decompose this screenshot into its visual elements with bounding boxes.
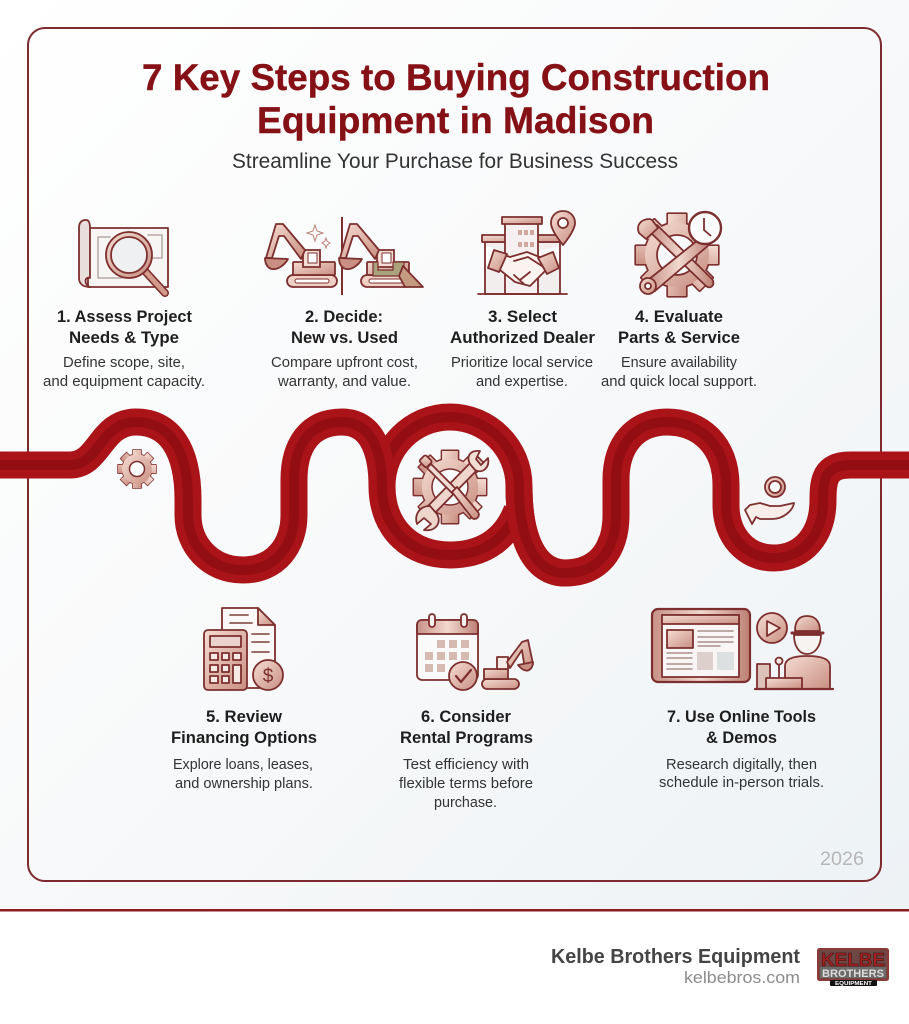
description: schedule in-person trials. xyxy=(659,775,824,791)
heading: New vs. Used xyxy=(291,328,398,347)
description xyxy=(271,355,418,390)
heading: 2. Decide: xyxy=(305,307,383,326)
description: and ownership plans. xyxy=(175,776,313,792)
icon: new and used excavators xyxy=(265,217,423,295)
heading: Parts & Service xyxy=(618,328,740,347)
step 6: rental programs xyxy=(399,614,533,811)
step 4: parts and service xyxy=(601,212,757,390)
heading: 7. Use Online Tools xyxy=(667,707,816,726)
description: Test efficiency with xyxy=(403,757,529,773)
title xyxy=(142,57,770,141)
panel: main frame xyxy=(28,28,881,881)
footer background xyxy=(0,911,909,1024)
description: and expertise. xyxy=(476,374,568,390)
heading xyxy=(171,707,317,747)
heading: Rental Programs xyxy=(400,728,533,747)
logo: Kelbe Brothers Equipment: EQUIPMENT xyxy=(835,981,872,987)
logo: Kelbe Brothers Equipment xyxy=(818,949,888,987)
icon: gear, wrenches and clock xyxy=(636,212,721,296)
description: Prioritize local service xyxy=(451,355,593,371)
title: 7 Key Steps to Buying Construction xyxy=(142,57,770,98)
description: Explore loans, leases, xyxy=(173,757,313,773)
heading xyxy=(618,307,740,347)
step 3: authorized dealer xyxy=(450,211,595,390)
footer url: kelbebros.com xyxy=(684,968,800,987)
logo: Kelbe Brothers Equipment: KELBE xyxy=(821,950,885,970)
description: Compare upfront cost, xyxy=(271,355,418,371)
heading: 1. Assess Project xyxy=(57,307,192,326)
icon: calendar, check and excavator xyxy=(417,614,533,690)
step 5: financing xyxy=(171,608,317,792)
icon: tablet and worker xyxy=(652,609,833,689)
heading xyxy=(57,307,192,347)
icon: calculator, document and coin: $ xyxy=(263,666,274,687)
step 1: assess project needs xyxy=(43,220,205,390)
description xyxy=(43,355,205,390)
heading: 5. Review xyxy=(206,707,283,726)
heading: Financing Options xyxy=(171,728,317,747)
description xyxy=(173,757,313,792)
subtitle: Streamline Your Purchase for Business Success xyxy=(232,150,678,173)
heading: 4. Evaluate xyxy=(635,307,723,326)
description: warranty, and value. xyxy=(277,374,411,390)
winding red road ribbon xyxy=(0,417,909,573)
description xyxy=(399,757,533,811)
heading: 6. Consider xyxy=(421,707,511,726)
description: and quick local support. xyxy=(601,374,757,390)
description xyxy=(659,757,824,791)
heading: Needs & Type xyxy=(69,328,179,347)
heading: Authorized Dealer xyxy=(450,328,595,347)
title: Equipment in Madison xyxy=(257,100,654,141)
footer brand name: Kelbe Brothers Equipment xyxy=(551,946,800,968)
heading xyxy=(450,307,595,347)
description: flexible terms before xyxy=(399,776,533,792)
icon: blueprint and magnifier xyxy=(79,220,168,293)
icon: small gear on road xyxy=(118,450,156,488)
description xyxy=(601,355,757,390)
heading xyxy=(291,307,398,347)
description: Research digitally, then xyxy=(666,757,817,773)
icon: dealership handshake and pin xyxy=(478,211,575,294)
step 2: new vs used xyxy=(265,217,423,390)
heading: 3. Select xyxy=(488,307,557,326)
description: purchase. xyxy=(434,795,497,811)
icon: hand holding coin xyxy=(745,477,794,524)
description: Ensure availability xyxy=(621,355,738,371)
heading: & Demos xyxy=(706,728,777,747)
description: and equipment capacity. xyxy=(43,374,205,390)
logo: Kelbe Brothers Equipment: BROTHERS xyxy=(822,968,884,980)
description: Define scope, site, xyxy=(63,355,185,371)
icon: calculator, document and coin xyxy=(204,608,283,690)
heading xyxy=(667,707,816,747)
heading xyxy=(400,707,533,747)
year label: 2026 xyxy=(820,849,864,870)
description xyxy=(451,355,593,390)
footer rule xyxy=(0,909,909,912)
icon: large gear with wrench and screwdriver xyxy=(414,451,488,530)
step 7: online tools xyxy=(652,609,833,791)
